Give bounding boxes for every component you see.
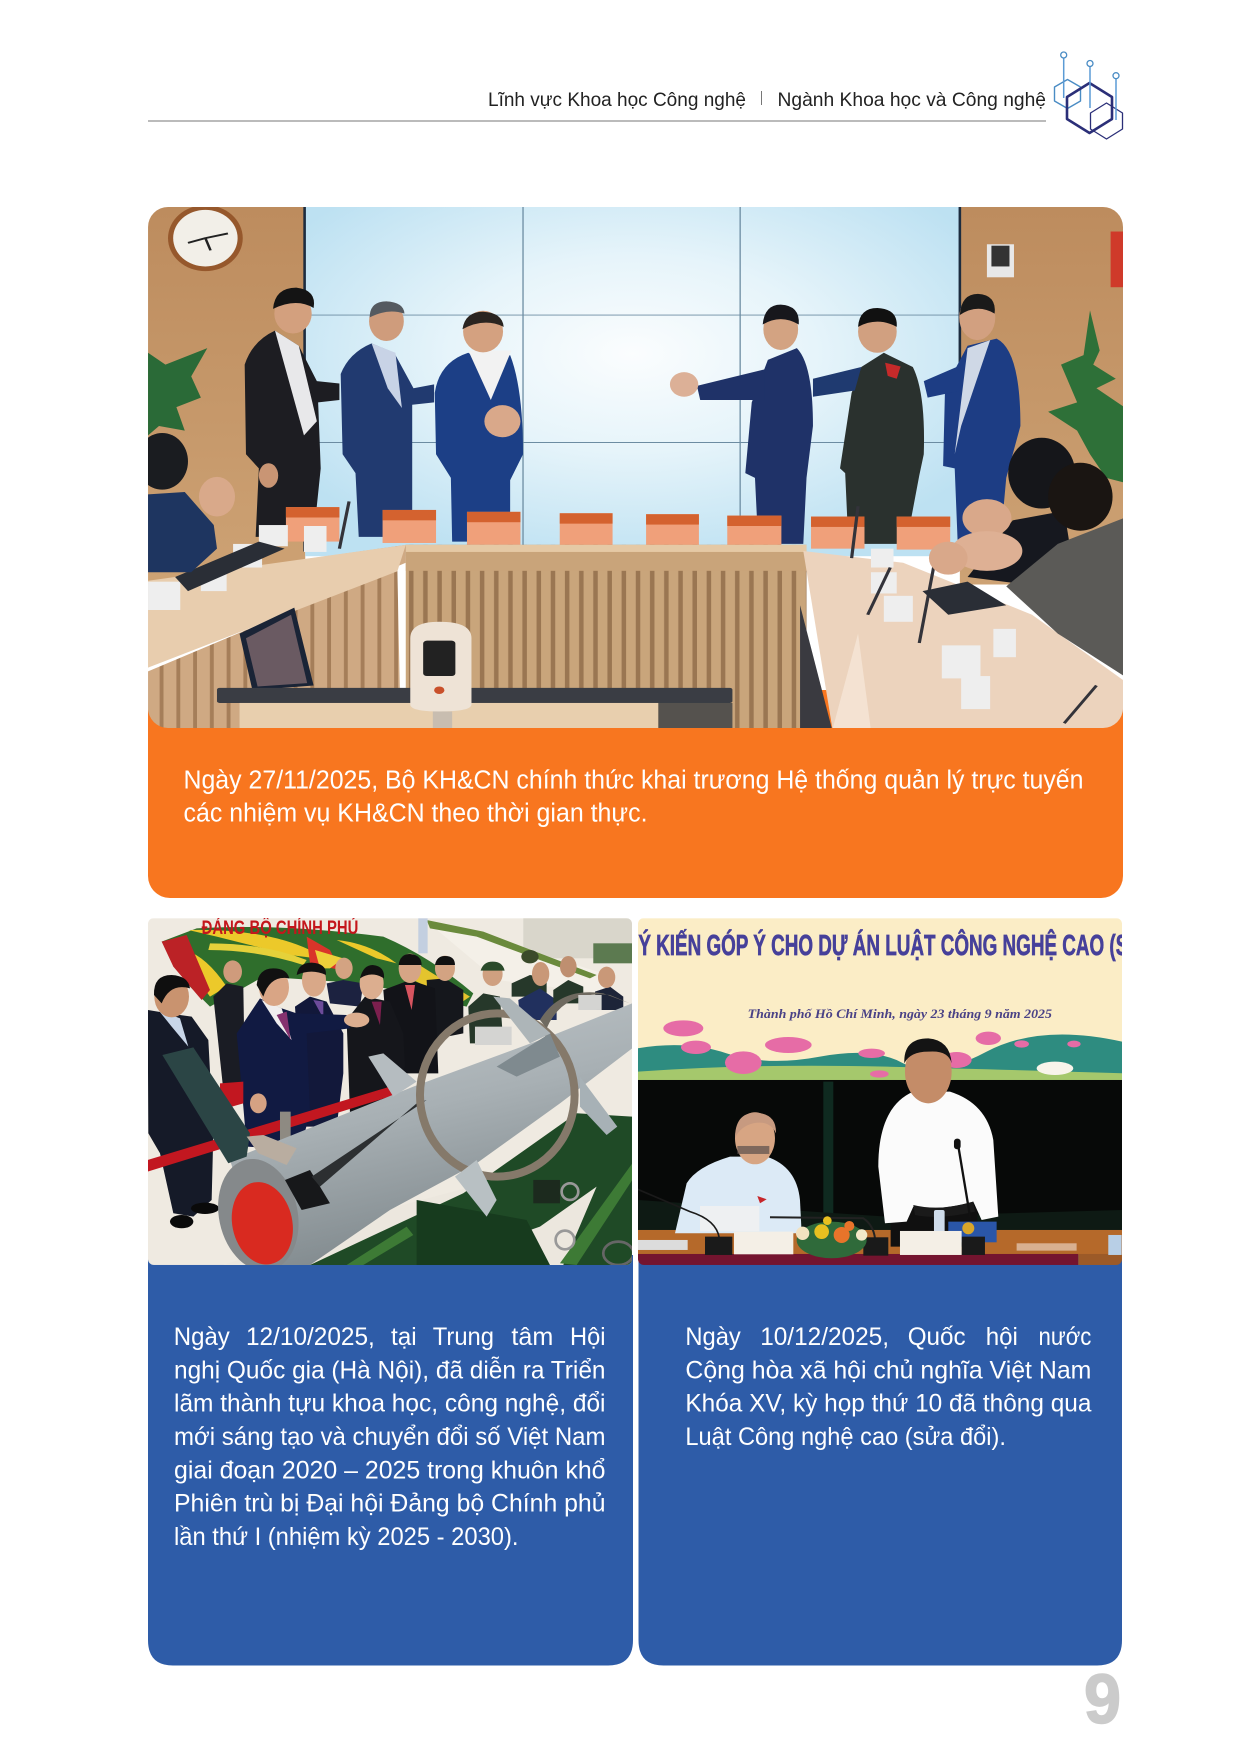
caption: High Technology Law: 10/12/2025, <box>760 1323 889 1351</box>
panel: launch of online management system <box>136 205 1127 898</box>
photo: high technology law meeting <box>638 918 1128 1265</box>
caption: launch of online system: các nhiệm vụ KH&CN theo thời gian thực. <box>184 799 648 827</box>
caption: exhibition: Phiên trù bị Đại hội Đảng bộ Chính phủ <box>174 1490 606 1518</box>
blue caption card <box>148 1255 633 1666</box>
header ministry title: Ngành Khoa học và Công nghệ <box>778 89 1046 111</box>
panel: passing of the High Technology Law <box>638 918 1128 1666</box>
caption: High Technology Law: hội <box>986 1323 1018 1351</box>
caption: exhibition: mới sáng tạo và chuyển đổi số Việt Nam <box>174 1423 606 1451</box>
caption: High Technology Law: Quốc <box>908 1323 966 1351</box>
photo: high technology law meeting: Thành phố Hồ Chí Minh, ngày 23 tháng 9 năm 2025 <box>748 1007 1052 1021</box>
caption: exhibition: 12/10/2025, <box>246 1323 375 1351</box>
caption: High Technology Law: nước <box>1038 1323 1091 1351</box>
header <box>148 52 1122 139</box>
orange caption card <box>148 690 1123 898</box>
caption: exhibition: tại <box>391 1323 417 1351</box>
caption: High Technology Law: Luật Công nghệ cao (sửa đổi). <box>685 1423 1006 1451</box>
caption: High Technology Law: Ngày <box>685 1323 741 1351</box>
header separator <box>761 91 762 105</box>
header section title: Lĩnh vực Khoa học Công nghệ <box>488 89 746 111</box>
caption: High Technology Law: Cộng hòa xã hội chủ nghĩa Việt Nam <box>685 1356 1091 1384</box>
caption: High Technology Law: Khóa XV, kỳ họp thứ 10 đã thông qua <box>685 1390 1091 1418</box>
caption: exhibition: lãm thành tựu khoa học, công nghệ, đổi <box>174 1390 606 1418</box>
photo: launch ceremony <box>136 205 1127 730</box>
photo: exhibition visit with missile <box>148 915 633 1279</box>
blue caption card <box>638 1255 1122 1666</box>
caption: exhibition: lần thứ I (nhiệm kỳ 2025 - 2030). <box>174 1523 518 1551</box>
caption: exhibition: tâm <box>511 1323 553 1351</box>
caption: exhibition: Hội <box>570 1323 606 1351</box>
caption: exhibition: nghị Quốc gia (Hà Nội), đã diễn ra Triển <box>174 1355 606 1384</box>
header rule <box>148 120 1046 122</box>
page number: 9 <box>1084 1660 1121 1738</box>
caption: exhibition: Trung <box>433 1323 494 1351</box>
panel: science and technology exhibition <box>148 915 633 1666</box>
caption: exhibition: giai đoạn 2020 – 2025 trong khuôn khổ <box>174 1456 606 1484</box>
photo: exhibition visit with missile: ĐẢNG BỘ CHÍNH PHỦ <box>202 915 358 939</box>
icon: hexagon molecule logo <box>1054 52 1122 139</box>
caption: exhibition: Ngày <box>174 1323 230 1351</box>
caption: launch of online system: Ngày 27/11/2025, Bộ KH&CN chính thức khai trương Hệ thống quản lý trực tuyến <box>184 766 1084 794</box>
